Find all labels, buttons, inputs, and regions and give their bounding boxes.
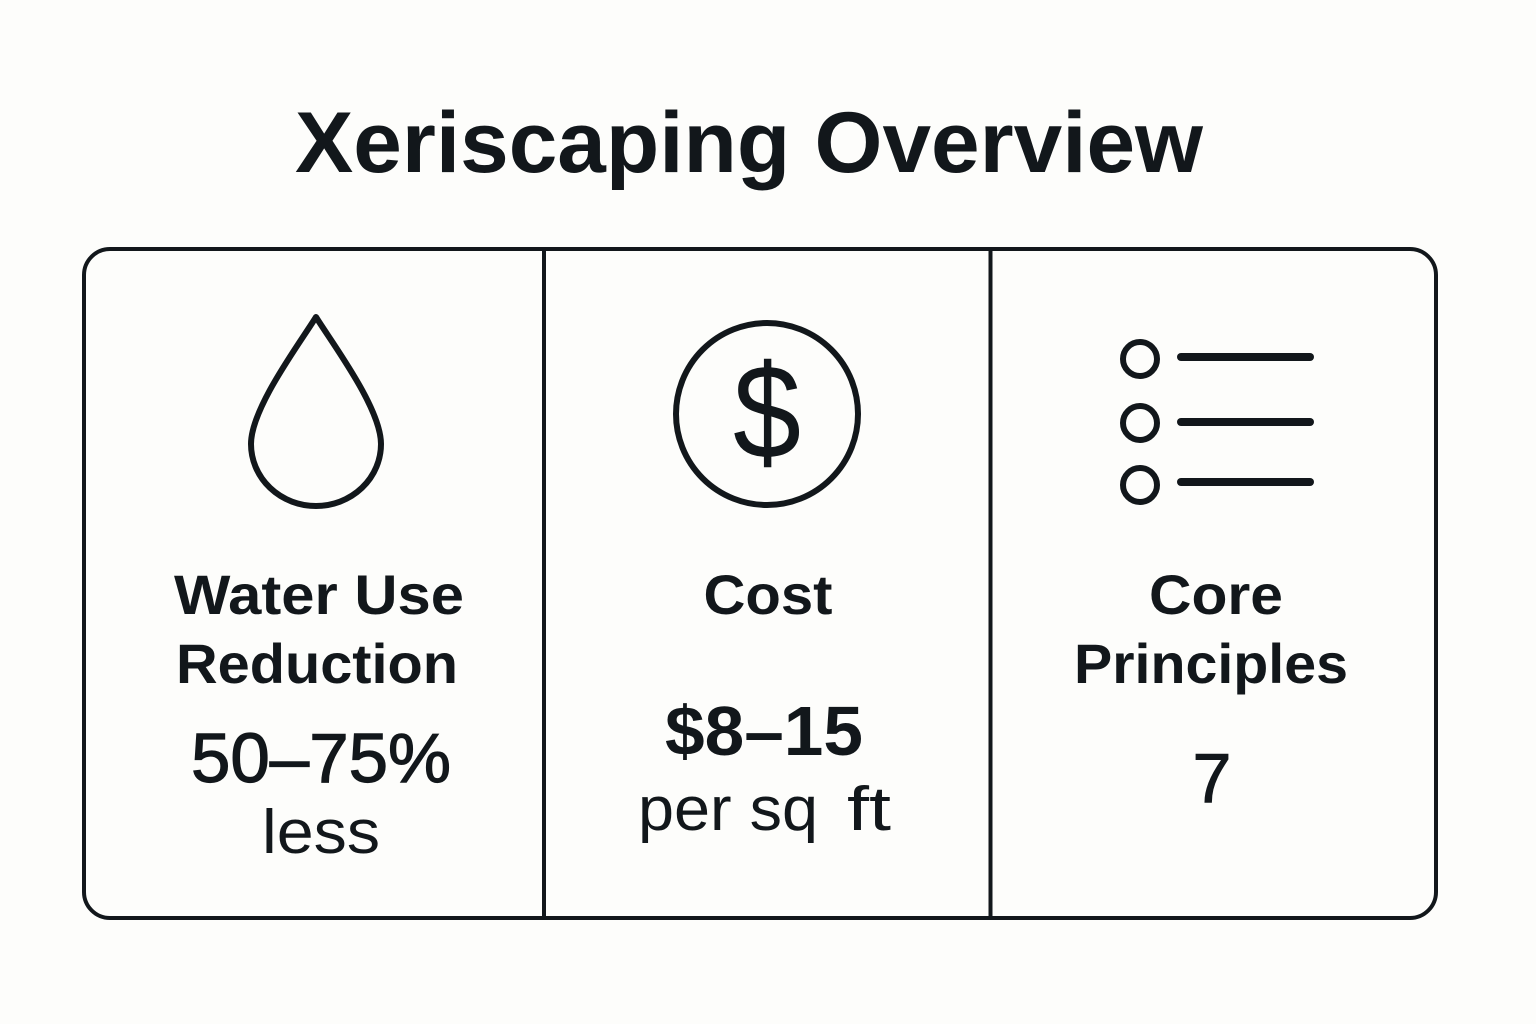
title: Xeriscaping Overview: [295, 95, 1204, 191]
value: 50–75% less: 50–75%: [191, 719, 451, 797]
heading: cost: Cost: [704, 563, 832, 626]
panel: cost: [638, 323, 891, 844]
heading: core principles: Principles: [1074, 632, 1348, 695]
value: $8–15 per sq ft: $8–15: [665, 692, 863, 770]
panel: water use reduction: [174, 317, 464, 867]
panel: overview table: [84, 249, 1436, 918]
heading: water use reduction: Water Use: [174, 563, 464, 626]
heading: core principles: Core: [1149, 563, 1283, 626]
value: 50–75% less: less: [262, 798, 380, 867]
value: 7: 7: [1193, 739, 1231, 817]
icon: dollar coin: $: [733, 338, 801, 487]
icon: water drop: [251, 317, 381, 506]
value: $8–15 per sq ft: ft: [847, 775, 891, 844]
panel: core principles: [1074, 342, 1348, 817]
icon: dollar coin: [676, 323, 858, 505]
value: $8–15 per sq ft: per sq: [638, 775, 818, 844]
heading: water use reduction: Reduction: [176, 632, 458, 695]
icon: list: [1123, 342, 1310, 502]
